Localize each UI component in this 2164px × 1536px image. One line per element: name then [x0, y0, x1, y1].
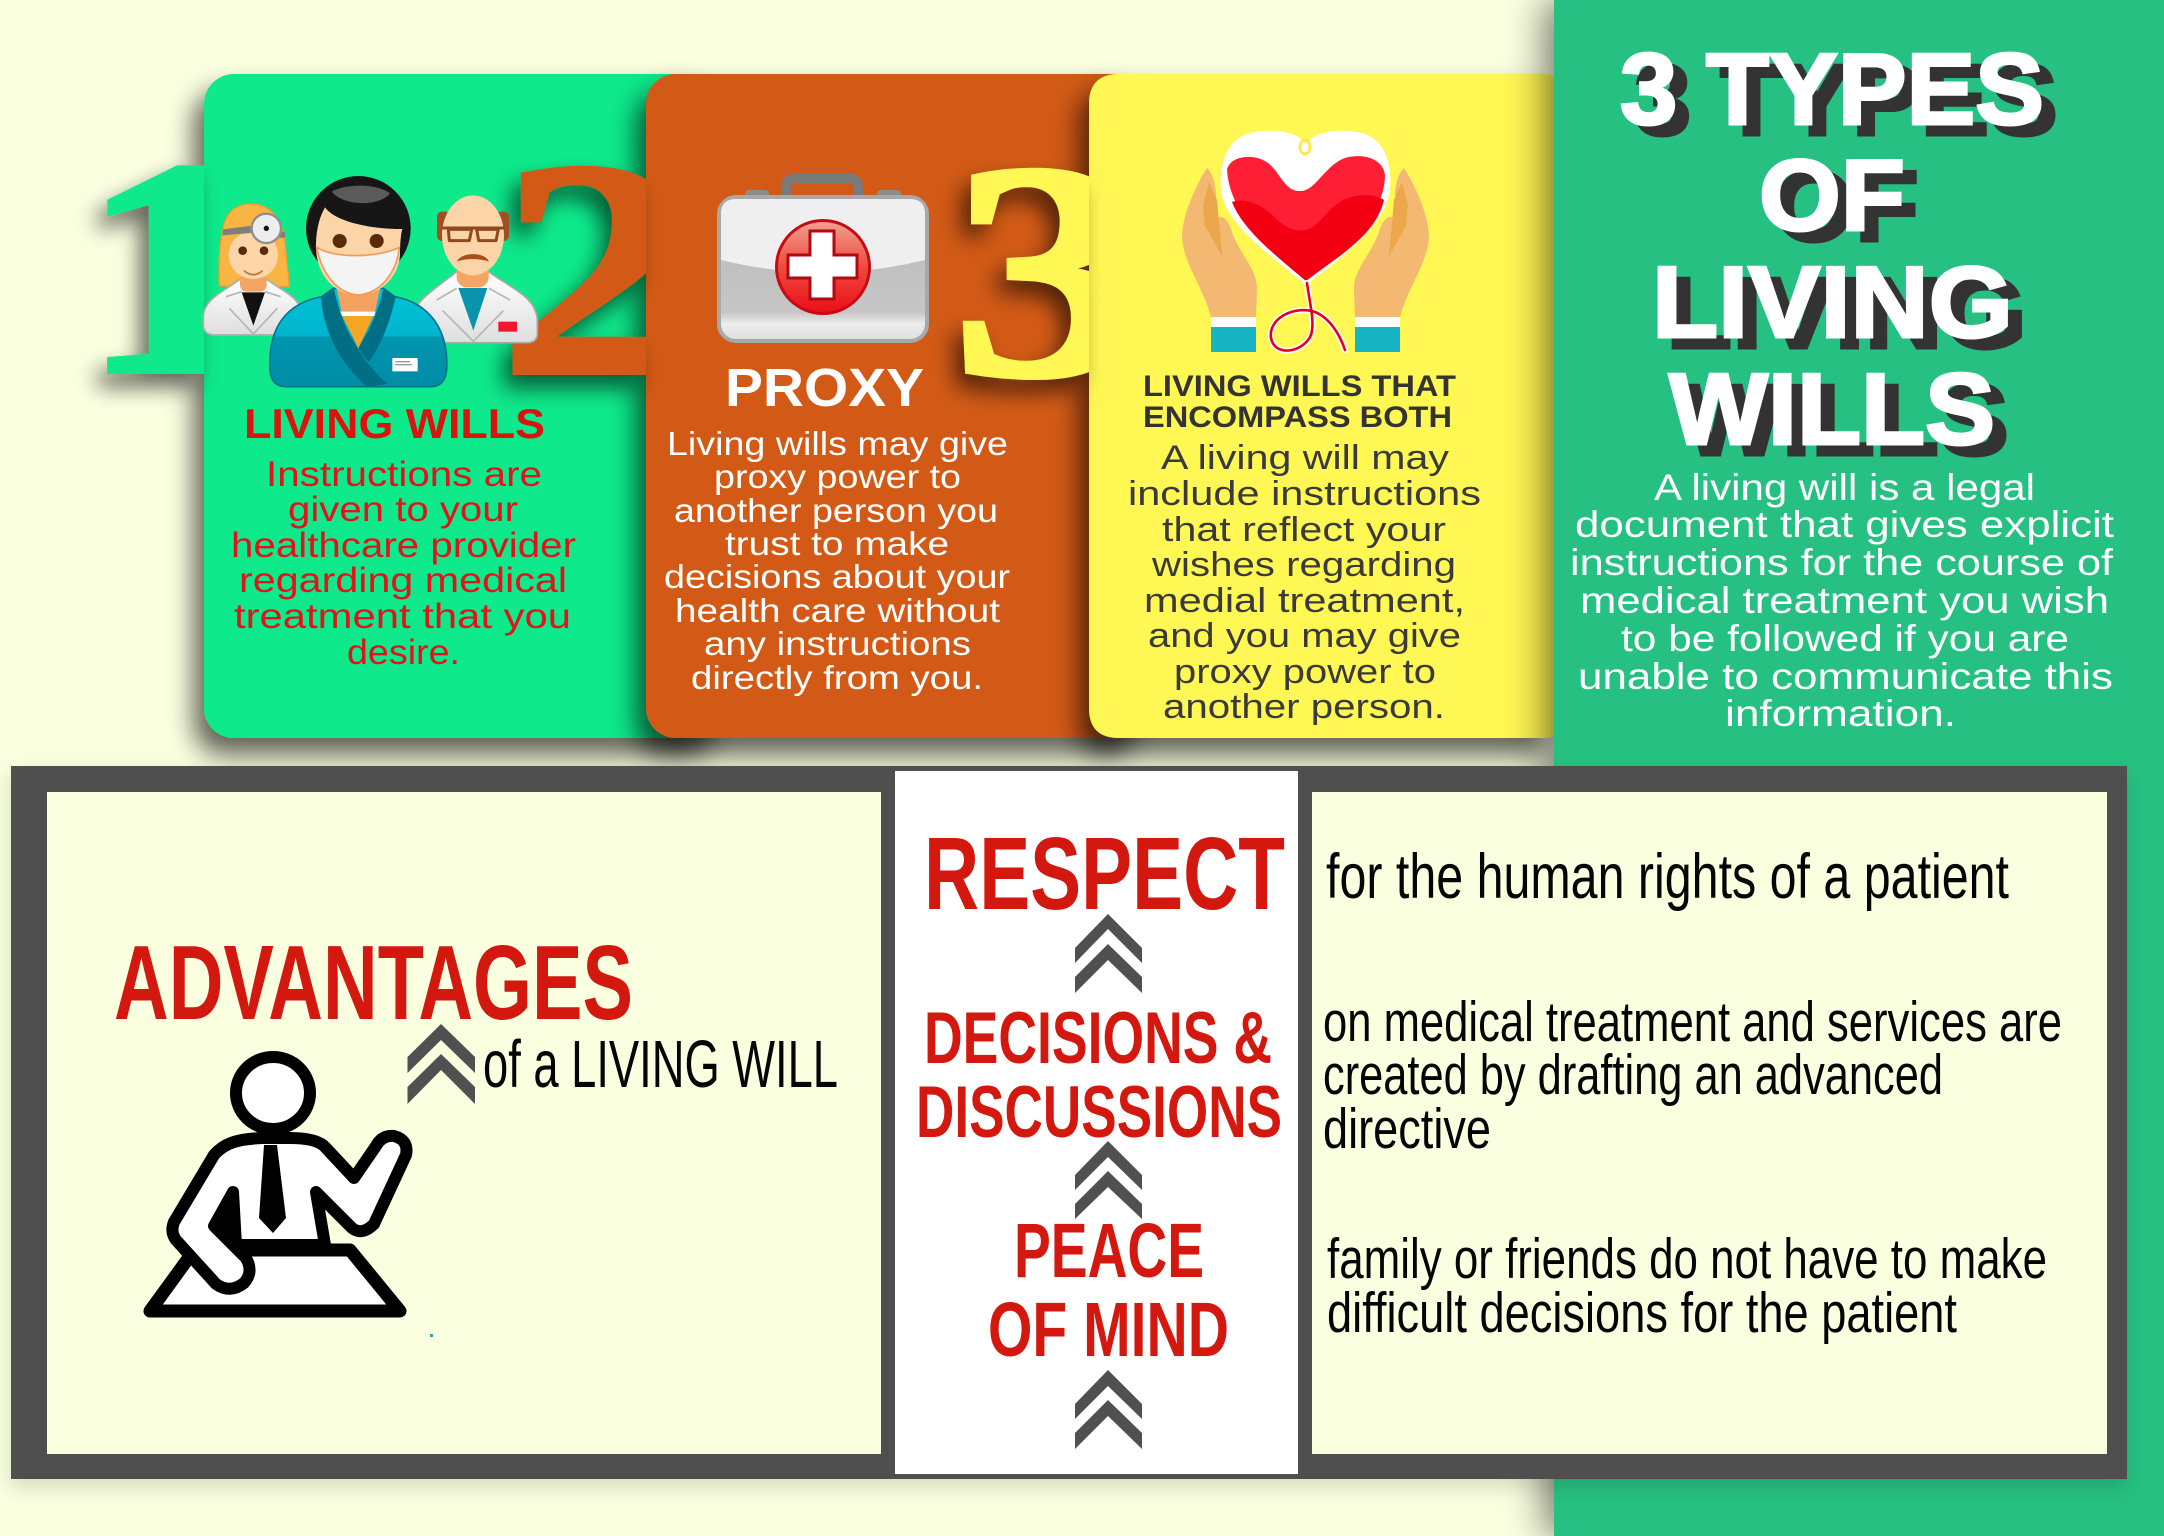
number 1: 1	[80, 97, 264, 440]
title: LIVING	[1652, 247, 2013, 359]
title shadow layer	[1634, 45, 2058, 477]
text: proxy description: directly from you.	[691, 659, 983, 696]
central doctor with mask	[270, 176, 447, 387]
text: living wills description	[231, 455, 576, 672]
text: both description: medial treatment,	[1144, 582, 1465, 620]
text: proxy description: any instructions	[704, 625, 971, 662]
panel: proxy card	[646, 74, 1146, 738]
panel: explanations	[1312, 792, 2107, 1454]
title: WILLS	[1669, 354, 1995, 466]
text: proxy description: health care without	[675, 592, 1000, 629]
heading: peace of mind: OF MIND	[988, 1287, 1229, 1373]
text: both heading	[1143, 370, 1456, 434]
panel: white ladder column	[895, 771, 1298, 1474]
title: OF	[1759, 140, 1905, 252]
text: both description: A living will may	[1161, 439, 1449, 477]
number 3: 3	[951, 100, 1141, 443]
text: living wills description: healthcare provider	[231, 526, 576, 565]
text: proxy description: proxy power to	[714, 458, 961, 495]
text: of a living will: of a LIVING WILL	[483, 1027, 838, 1102]
heading: decisions and discussions: DECISIONS &	[924, 998, 1272, 1079]
text: proxy description: decisions about your	[664, 558, 1010, 595]
text: both description: that reflect your	[1162, 511, 1446, 549]
panel: living wills card	[204, 74, 724, 738]
icon: double chevron beside heading	[408, 1024, 475, 1104]
title: 3 TYPES	[1620, 34, 2044, 146]
text: both description: wishes regarding	[1151, 546, 1456, 584]
text: both heading: LIVING WILLS THAT	[1143, 370, 1456, 403]
heading: respect: RESPECT	[924, 816, 1285, 931]
panel: dark frame	[11, 766, 2127, 1479]
icon: heart blood bag held by hands	[1182, 131, 1429, 352]
panel: advantages	[47, 792, 881, 1454]
text: living wills heading: LIVING WILLS	[244, 400, 545, 447]
icon: chevron 2	[1075, 1141, 1142, 1219]
text: definition of a living will: A living will is a legal	[1654, 467, 2035, 508]
text: proxy description: trust to make	[725, 525, 949, 562]
text: definition of a living will: information.	[1725, 693, 1956, 734]
panel: both card	[1089, 74, 1554, 738]
icon: chevron 3	[1075, 1370, 1142, 1449]
left hand	[1182, 168, 1257, 318]
text: both description	[1128, 439, 1481, 726]
text: living wills description: treatment that you	[234, 597, 571, 636]
title shadow layer: 3 TYPES	[1634, 45, 2058, 157]
icon: chevron 1	[1075, 914, 1142, 993]
female doctor	[203, 204, 302, 335]
icon: first aid kit	[719, 178, 927, 341]
heading: decisions and discussions	[916, 998, 1282, 1153]
icon: person at desk	[150, 1057, 433, 1337]
heading: advantages: ADVANTAGES	[114, 924, 633, 1042]
heading: decisions and discussions: DISCUSSIONS	[916, 1072, 1282, 1153]
text: peace of mind explanation: difficult decisions for the patient	[1327, 1281, 1957, 1345]
text: living wills description: regarding medical	[239, 561, 567, 600]
text: definition of a living will: unable to communicate this	[1578, 656, 2113, 697]
text: peace of mind explanation	[1327, 1227, 2047, 1345]
text: decisions explanation: directive	[1323, 1097, 1491, 1161]
text: definition of a living will	[1570, 467, 2115, 734]
text: proxy description	[664, 425, 1010, 696]
text: decisions explanation	[1323, 990, 2062, 1161]
text: living wills description: desire.	[347, 633, 460, 672]
heading: peace of mind	[988, 1208, 1229, 1373]
title shadow layer: WILLS	[1683, 365, 2009, 477]
panel: green title column	[1554, 0, 2164, 1536]
text: definition of a living will: document that gives explicit	[1575, 504, 2115, 545]
text: definition of a living will: instructions for the course of	[1570, 542, 2114, 583]
text: both heading: ENCOMPASS BOTH	[1143, 401, 1452, 434]
text: proxy description: Living wills may give	[667, 425, 1008, 462]
text: both description: and you may give	[1148, 617, 1461, 655]
number 2: 2	[499, 98, 689, 441]
title shadow layer: LIVING	[1666, 258, 2027, 370]
text: both description: proxy power to	[1174, 653, 1436, 691]
text: definition of a living will: medical treatment you wish	[1580, 580, 2109, 621]
text: living wills description: Instructions are	[266, 455, 542, 494]
title shadow layer: OF	[1773, 151, 1919, 263]
text: proxy description: another person you	[674, 492, 998, 529]
text: living wills description: given to your	[288, 490, 518, 529]
title	[1620, 34, 2044, 466]
text: both description: another person.	[1163, 688, 1445, 726]
male doctor with glasses	[412, 195, 537, 343]
right hand	[1354, 168, 1429, 318]
text: decisions explanation: created by drafting an advanced	[1323, 1043, 1943, 1107]
icon: medical team	[203, 176, 537, 387]
text: proxy heading: PROXY	[725, 358, 924, 418]
text: both description: include instructions	[1128, 475, 1481, 513]
heading: peace of mind: PEACE	[1014, 1208, 1204, 1294]
text: definition of a living will: to be followed if you are	[1621, 618, 2069, 659]
